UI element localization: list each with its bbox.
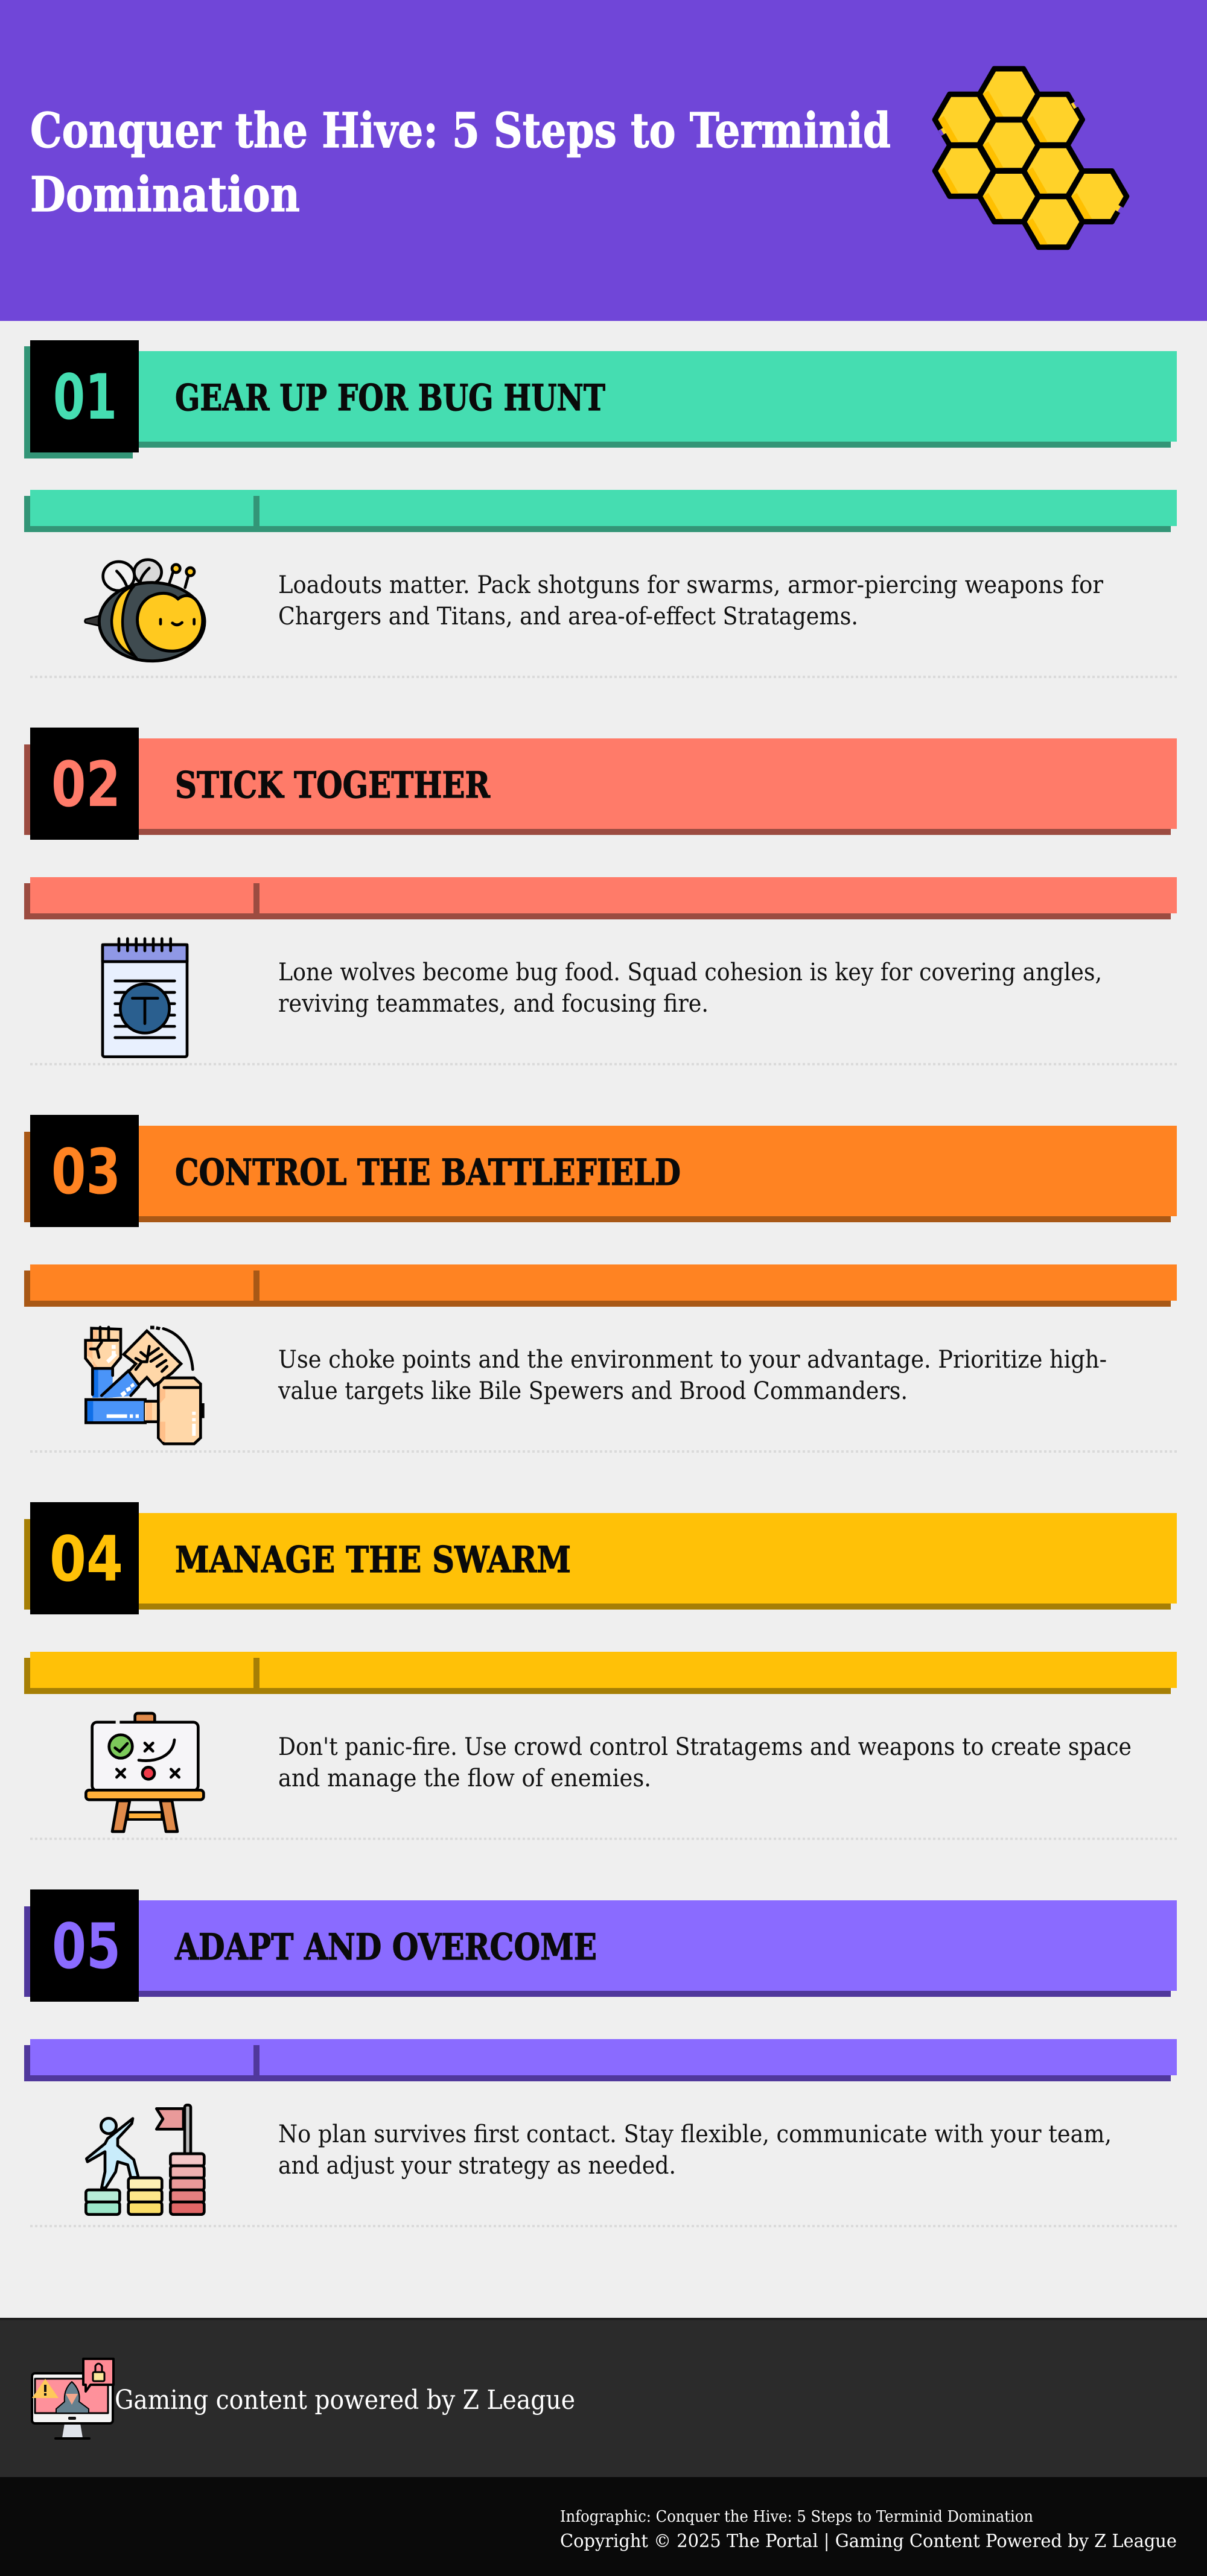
text block 05: No plan survives first contact. Stay flexible, communicate with your team, — [278, 2121, 1112, 2148]
title: Conquer the Hive: 5 Steps to Terminid — [30, 102, 891, 159]
heading bar 01: GEAR UP FOR BUG HUNT — [175, 377, 605, 419]
text block 04: Don't panic-fire. Use crowd control Stratagems and weapons to create space — [278, 1733, 1132, 1761]
heading bar 05 — [24, 1900, 1177, 1997]
text block 04 — [278, 1733, 1132, 1792]
table header bar 02 — [24, 877, 1177, 919]
copyright bar — [0, 2477, 1207, 2576]
text block 02 — [278, 959, 1102, 1018]
text block 02: Lone wolves become bug food. Squad cohesion is key for covering angles, — [278, 959, 1102, 986]
heading bar 03: CONTROL THE BATTLEFIELD — [175, 1152, 681, 1194]
icon: bee — [84, 560, 205, 661]
text block 02: reviving teammates, and focusing fire. — [278, 990, 709, 1018]
table header bar 04 — [24, 1652, 1177, 1694]
title: Domination — [30, 166, 300, 223]
panel: step 05 — [24, 1889, 1177, 2226]
copyright line: Copyright © 2025 The Portal | Gaming Content Powered by Z League — [560, 2531, 1177, 2552]
icon: climbing steps with flag — [86, 2105, 204, 2215]
panel: step 02 — [24, 728, 1177, 1064]
icon: raised fists — [86, 1326, 205, 1444]
heading bar 04 — [24, 1513, 1177, 1610]
table header bar 01 — [24, 490, 1177, 532]
icon: honeycomb — [935, 69, 1127, 247]
panel: step 01 — [24, 340, 1177, 677]
heading bar 02 — [24, 738, 1177, 835]
icon: hacker monitor — [32, 2359, 113, 2440]
icon: strategy easel — [86, 1713, 203, 1832]
heading bar 01 — [133, 351, 1177, 448]
heading bar 02: STICK TOGETHER — [175, 764, 491, 807]
text block 01: Loadouts matter. Pack shotguns for swarms, armor-piercing weapons for — [278, 571, 1104, 599]
table header bar 03 — [24, 1264, 1177, 1307]
number badge 03 — [30, 1115, 139, 1227]
number badge 03: 03 — [51, 1136, 121, 1208]
title — [30, 102, 891, 223]
footer brand text: Gaming content powered by Z League — [115, 2385, 575, 2416]
footer band — [0, 2318, 1207, 2477]
number badge 02 — [30, 728, 139, 840]
text block 03: Use choke points and the environment to your advantage. Prioritize high- — [278, 1346, 1107, 1374]
text block 03 — [278, 1346, 1107, 1405]
panel: step 04 — [24, 1502, 1177, 1839]
heading bar 03 — [24, 1126, 1177, 1222]
heading bar 04: MANAGE THE SWARM — [175, 1539, 571, 1581]
panel: step 03 — [24, 1115, 1177, 1451]
table header bar 05 — [24, 2039, 1177, 2081]
icon: notebook — [103, 939, 187, 1057]
text block 05: and adjust your strategy as needed. — [278, 2152, 676, 2180]
number badge 01: 01 — [53, 361, 117, 434]
credit line: Infographic: Conquer the Hive: 5 Steps to Terminid Domination — [560, 2508, 1033, 2526]
number badge 05: 05 — [52, 1911, 121, 1983]
number badge 02: 02 — [51, 749, 121, 821]
number badge 05 — [30, 1889, 139, 2002]
text block 03: value targets like Bile Spewers and Brood Commanders. — [278, 1377, 908, 1405]
header banner — [0, 0, 1207, 321]
heading bar 05: ADAPT AND OVERCOME — [174, 1926, 597, 1968]
text block 01: Chargers and Titans, and area-of-effect Stratagems. — [278, 603, 858, 630]
number badge 04: 04 — [49, 1523, 123, 1596]
number badge 04 — [30, 1502, 139, 1614]
text block 04: and manage the flow of enemies. — [278, 1765, 651, 1792]
text block 05 — [278, 2121, 1112, 2180]
number badge 01 — [24, 340, 139, 458]
text block 01 — [278, 571, 1104, 630]
